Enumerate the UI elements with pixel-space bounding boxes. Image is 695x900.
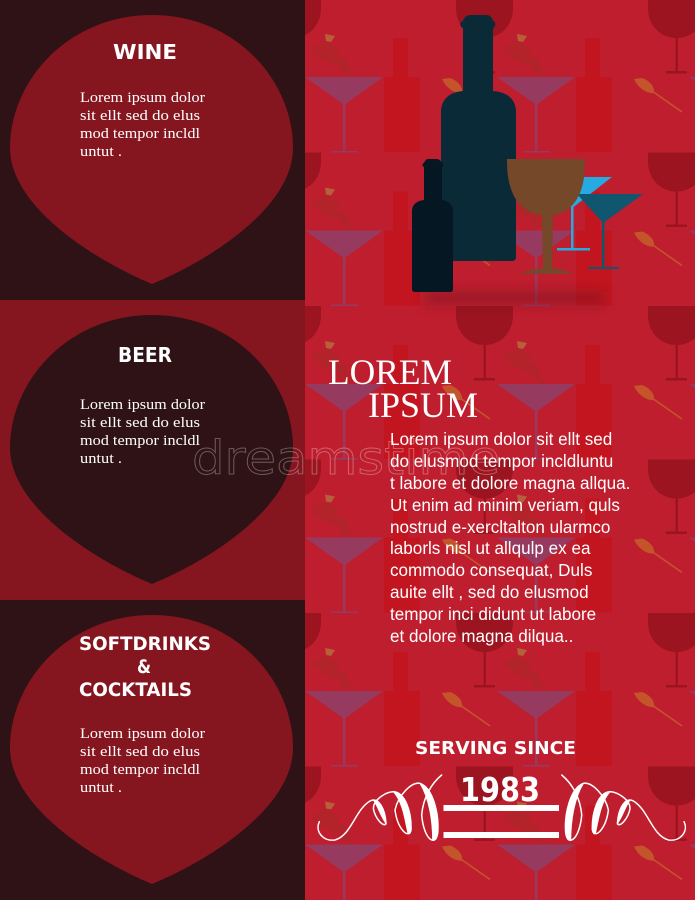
beer text: untut . xyxy=(80,451,122,467)
beer drop shape xyxy=(10,315,293,584)
beer text: Lorem ipsum dolor xyxy=(80,397,205,413)
main text block: Lorem ipsum dolor sit ellt sed xyxy=(390,430,612,449)
wine text: sit ellt sed do elus xyxy=(80,108,200,124)
wine heading: WINE xyxy=(113,40,177,64)
flourish right xyxy=(562,775,685,840)
softdrinks heading: & xyxy=(137,656,151,678)
beer heading: BEER xyxy=(118,343,172,367)
main text block: tempor inci didunt ut labore xyxy=(390,605,596,624)
wine text: mod tempor incldl xyxy=(80,126,200,142)
icon: cyan martini glass xyxy=(535,177,612,250)
main title xyxy=(328,352,478,425)
wine text xyxy=(80,90,205,160)
beer text: mod tempor incldl xyxy=(80,433,200,449)
main text block: et dolore magna dilqua.. xyxy=(390,627,573,646)
softdrinks text xyxy=(80,726,205,796)
main title: IPSUM xyxy=(368,385,478,425)
serving since heading: SERVING SINCE xyxy=(415,738,576,759)
panel: wine xyxy=(0,0,305,300)
main text block: commodo consequat, Duls xyxy=(390,561,592,580)
wine text: Lorem ipsum dolor xyxy=(80,90,205,106)
softdrinks text: sit ellt sed do elus xyxy=(80,744,200,760)
serving since badge xyxy=(318,738,685,840)
main text block: laborls nisl ut allqulp ex ea xyxy=(390,539,591,558)
shadow xyxy=(425,292,605,304)
wine drop shape xyxy=(10,15,293,284)
year: 1983 xyxy=(460,770,540,809)
main text block: do elusmod tempor incldluntu xyxy=(390,452,613,471)
main text block: nostrud e-xercltalton ularmco xyxy=(390,518,610,537)
softdrinks drop shape xyxy=(10,615,293,884)
panel: softdrinks and cocktails xyxy=(0,600,305,900)
icon: large bottle xyxy=(441,15,516,261)
icon: small bottle xyxy=(412,159,453,292)
beer text xyxy=(80,397,205,467)
icon: teal martini glass xyxy=(577,194,643,269)
bottles and glasses illustration xyxy=(412,15,643,304)
softdrinks text: Lorem ipsum dolor xyxy=(80,726,205,742)
beer text: sit ellt sed do elus xyxy=(80,415,200,431)
panel: beer xyxy=(0,300,305,600)
main text block: auite ellt , sed do elusmod xyxy=(390,583,589,602)
softdrinks heading xyxy=(79,633,211,701)
softdrinks heading: SOFTDRINKS xyxy=(79,633,211,655)
wine text: untut . xyxy=(80,144,122,160)
softdrinks text: mod tempor incldl xyxy=(80,762,200,778)
softdrinks text: untut . xyxy=(80,780,122,796)
icon: brown goblet xyxy=(507,159,585,274)
background pattern of drinks xyxy=(264,0,695,900)
main text block: t labore et dolore magna allqua. xyxy=(390,474,630,493)
main text block: Ut enim ad minim veriam, quls xyxy=(390,496,620,515)
softdrinks heading: COCKTAILS xyxy=(79,679,192,701)
divider bars xyxy=(444,805,559,838)
watermark: dreamstime xyxy=(192,431,500,485)
main title: LOREM xyxy=(328,352,452,392)
flourish left xyxy=(318,775,442,840)
